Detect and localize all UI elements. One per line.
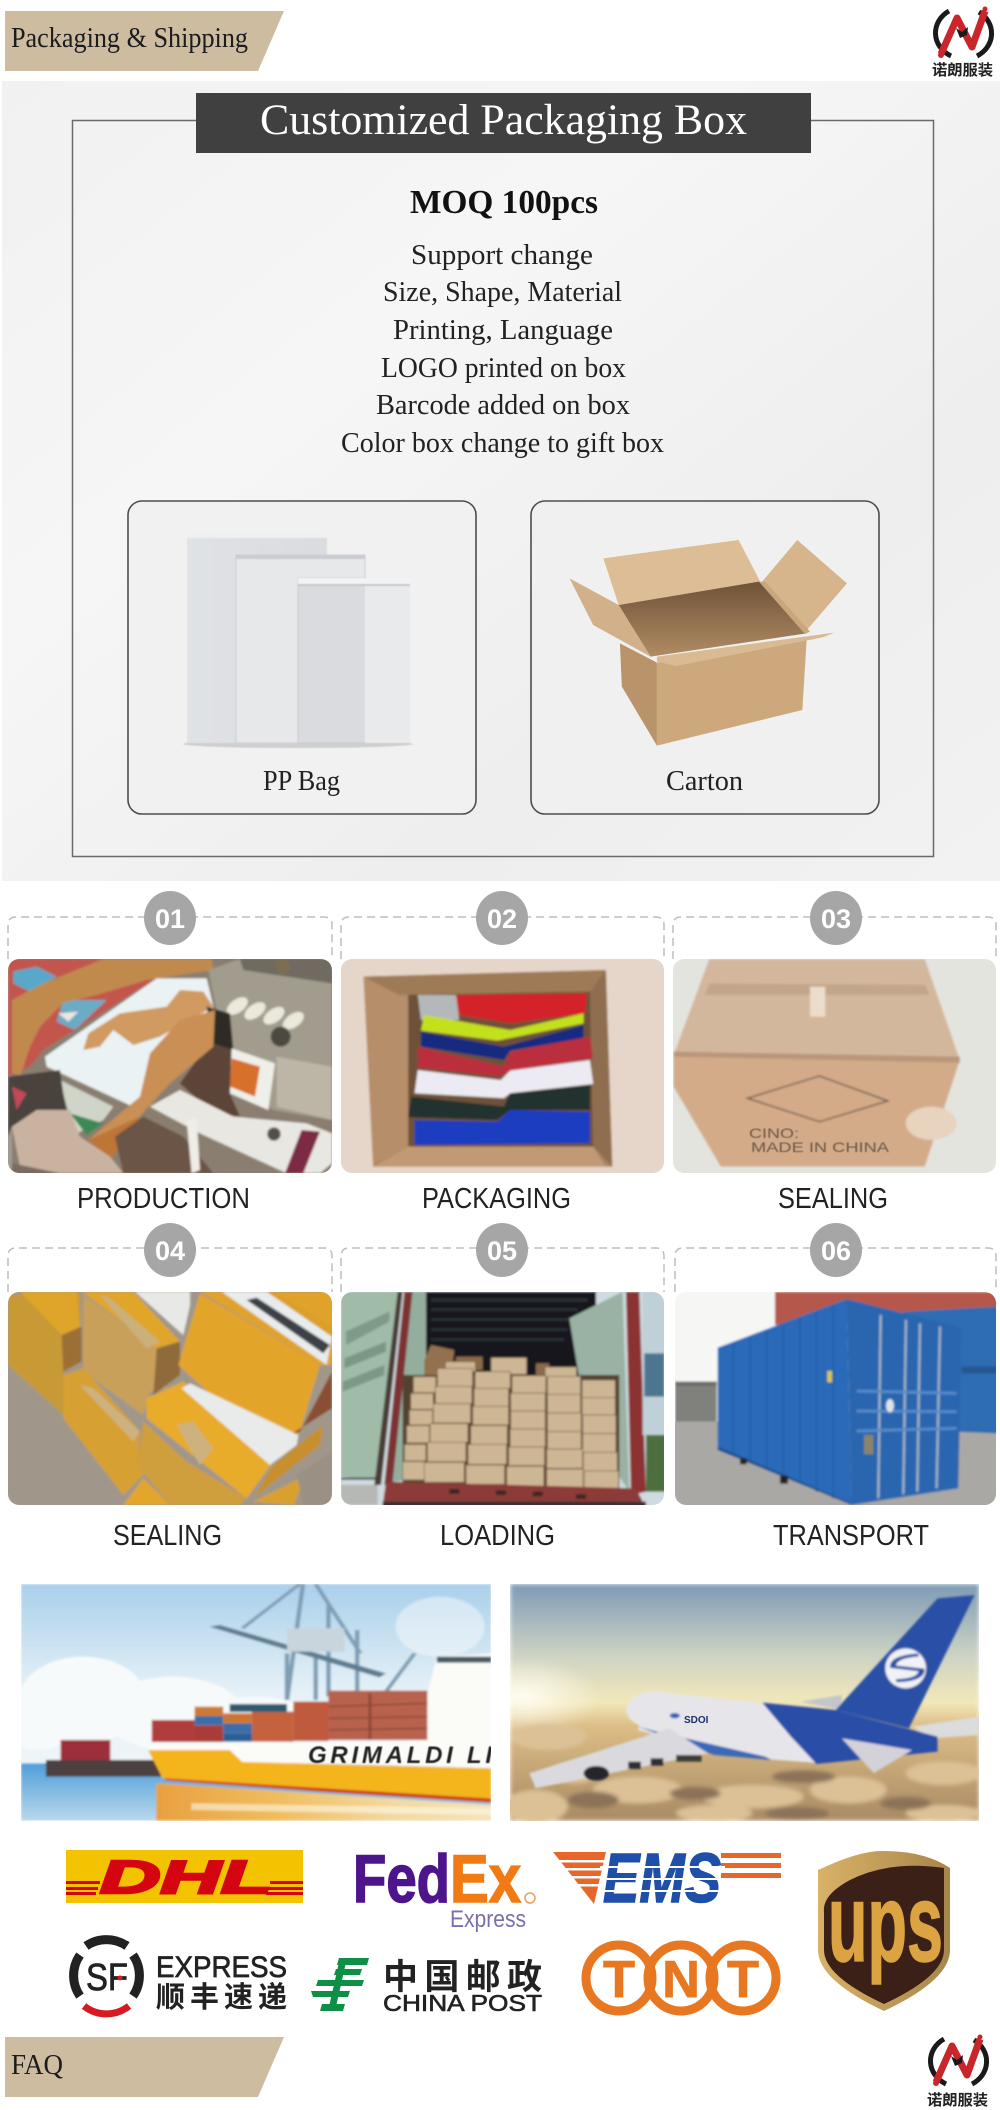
number badge 04: 04 bbox=[155, 1236, 185, 1266]
card: carton bbox=[531, 501, 879, 814]
brand logo top bbox=[932, 6, 993, 79]
label: PRODUCTION: PRODUCTION bbox=[77, 1183, 250, 1215]
label: PP Bag: PP Bag bbox=[263, 765, 340, 797]
label: PACKAGING: PACKAGING bbox=[422, 1183, 571, 1215]
carton print text: CINO: bbox=[749, 1125, 799, 1141]
number badge 02: 02 bbox=[487, 904, 517, 934]
icon: open carton box bbox=[570, 540, 847, 746]
photo: container ship at port bbox=[0, 1584, 493, 1821]
customization options list: Barcode added on box bbox=[376, 389, 630, 421]
logo: EMS bbox=[553, 1839, 781, 1917]
customization options list: Printing, Language bbox=[393, 314, 613, 346]
number badge 03 bbox=[810, 891, 862, 945]
number badge 04 bbox=[144, 1223, 196, 1277]
footer tag: FAQ bbox=[5, 2037, 284, 2097]
step 02: packaging bbox=[338, 891, 670, 1215]
MOQ heading: MOQ 100pcs bbox=[410, 184, 598, 221]
label: SEALING: SEALING bbox=[778, 1183, 888, 1215]
icon: PP bags bbox=[183, 533, 413, 748]
logo: SF Express: EXPRESS bbox=[156, 1951, 287, 1984]
customization options list: Support change bbox=[411, 239, 593, 271]
step 05: loading bbox=[336, 1223, 673, 1552]
carton print text: MADE IN CHINA bbox=[751, 1139, 890, 1155]
courier logos bbox=[66, 1839, 950, 2016]
panel: customized packaging box bbox=[2, 81, 1000, 881]
photo: sealed carton bbox=[670, 957, 1000, 1177]
title banner: Customized Packaging Box bbox=[260, 97, 747, 144]
customization options list: Size, Shape, Material bbox=[383, 276, 622, 308]
logo: China Post: 中国邮政 bbox=[383, 1958, 542, 1997]
brand logo bottom: 诺朗服装 bbox=[927, 2091, 988, 2109]
logo: FedEx Express: Fed bbox=[353, 1841, 450, 1917]
logo: TNT: N bbox=[662, 1951, 700, 2009]
logo: SF Express: SF bbox=[86, 1957, 128, 1999]
logo: TNT: T bbox=[727, 1951, 759, 2009]
number badge 01 bbox=[144, 891, 196, 945]
brand logo bottom bbox=[927, 2034, 988, 2109]
step 03: sealing bbox=[670, 891, 1000, 1215]
customization options list: LOGO printed on box bbox=[381, 352, 626, 384]
photo: shipping container bbox=[670, 1285, 1000, 1515]
step 01: production bbox=[0, 891, 340, 1215]
customization options list: Color box change to gift box bbox=[341, 427, 664, 459]
photo: packaging bbox=[338, 957, 670, 1177]
photo: cargo airplane in clouds bbox=[510, 1584, 979, 1821]
logo: SF Express bbox=[74, 1940, 287, 2014]
logo: TNT bbox=[586, 1945, 776, 2011]
number badge 06 bbox=[810, 1223, 862, 1277]
number badge 03: 03 bbox=[821, 904, 851, 934]
logo: UPS shield bbox=[818, 1851, 950, 2011]
photo: production bbox=[8, 959, 332, 1173]
number badge 05 bbox=[476, 1223, 528, 1277]
logo: DHL: DHL bbox=[100, 1851, 272, 1903]
photo: container loading bbox=[341, 1292, 664, 1505]
customization options list bbox=[341, 239, 664, 459]
title banner bbox=[196, 93, 811, 153]
logo: DHL bbox=[66, 1850, 303, 1903]
footer tag: FAQ: FAQ bbox=[11, 2050, 63, 2081]
hull lettering: GRIMALDI LI bbox=[308, 1742, 493, 1769]
label: LOADING: LOADING bbox=[440, 1520, 555, 1552]
header tag: Packaging & Shipping bbox=[5, 11, 284, 71]
number badge 01: 01 bbox=[155, 904, 185, 934]
logo: TNT: T bbox=[603, 1951, 635, 2009]
step 06: transport bbox=[670, 1223, 1000, 1552]
header tag: Packaging & Shipping: Packaging & Shipping bbox=[11, 22, 248, 54]
number badge 05: 05 bbox=[487, 1236, 517, 1266]
logo: FedEx Express bbox=[353, 1841, 535, 1933]
logo: EMS: EMS bbox=[603, 1839, 721, 1917]
logo: China Post: CHINA POST bbox=[383, 1990, 542, 2016]
panel frame bbox=[72, 120, 934, 856]
label: TRANSPORT: TRANSPORT bbox=[773, 1520, 929, 1552]
number badge 06: 06 bbox=[821, 1236, 851, 1266]
airline lettering: SDOI bbox=[684, 1715, 709, 1726]
carton print text bbox=[749, 1128, 890, 1153]
photo: taped cartons bbox=[8, 1292, 332, 1505]
label: SEALING: SEALING bbox=[113, 1520, 222, 1552]
step 04: sealing bbox=[0, 1223, 340, 1552]
number badge 02 bbox=[476, 891, 528, 945]
logo: China Post bbox=[311, 1958, 542, 2016]
brand logo top: 诺朗服装 bbox=[932, 61, 993, 79]
card: PP bag bbox=[128, 501, 476, 814]
logo: SF Express: 顺丰速递 bbox=[156, 1981, 287, 2014]
label: Carton: Carton bbox=[666, 765, 743, 797]
logo: FedEx Express: Ex bbox=[450, 1841, 521, 1917]
logo: FedEx Express: Express bbox=[450, 1906, 526, 1933]
